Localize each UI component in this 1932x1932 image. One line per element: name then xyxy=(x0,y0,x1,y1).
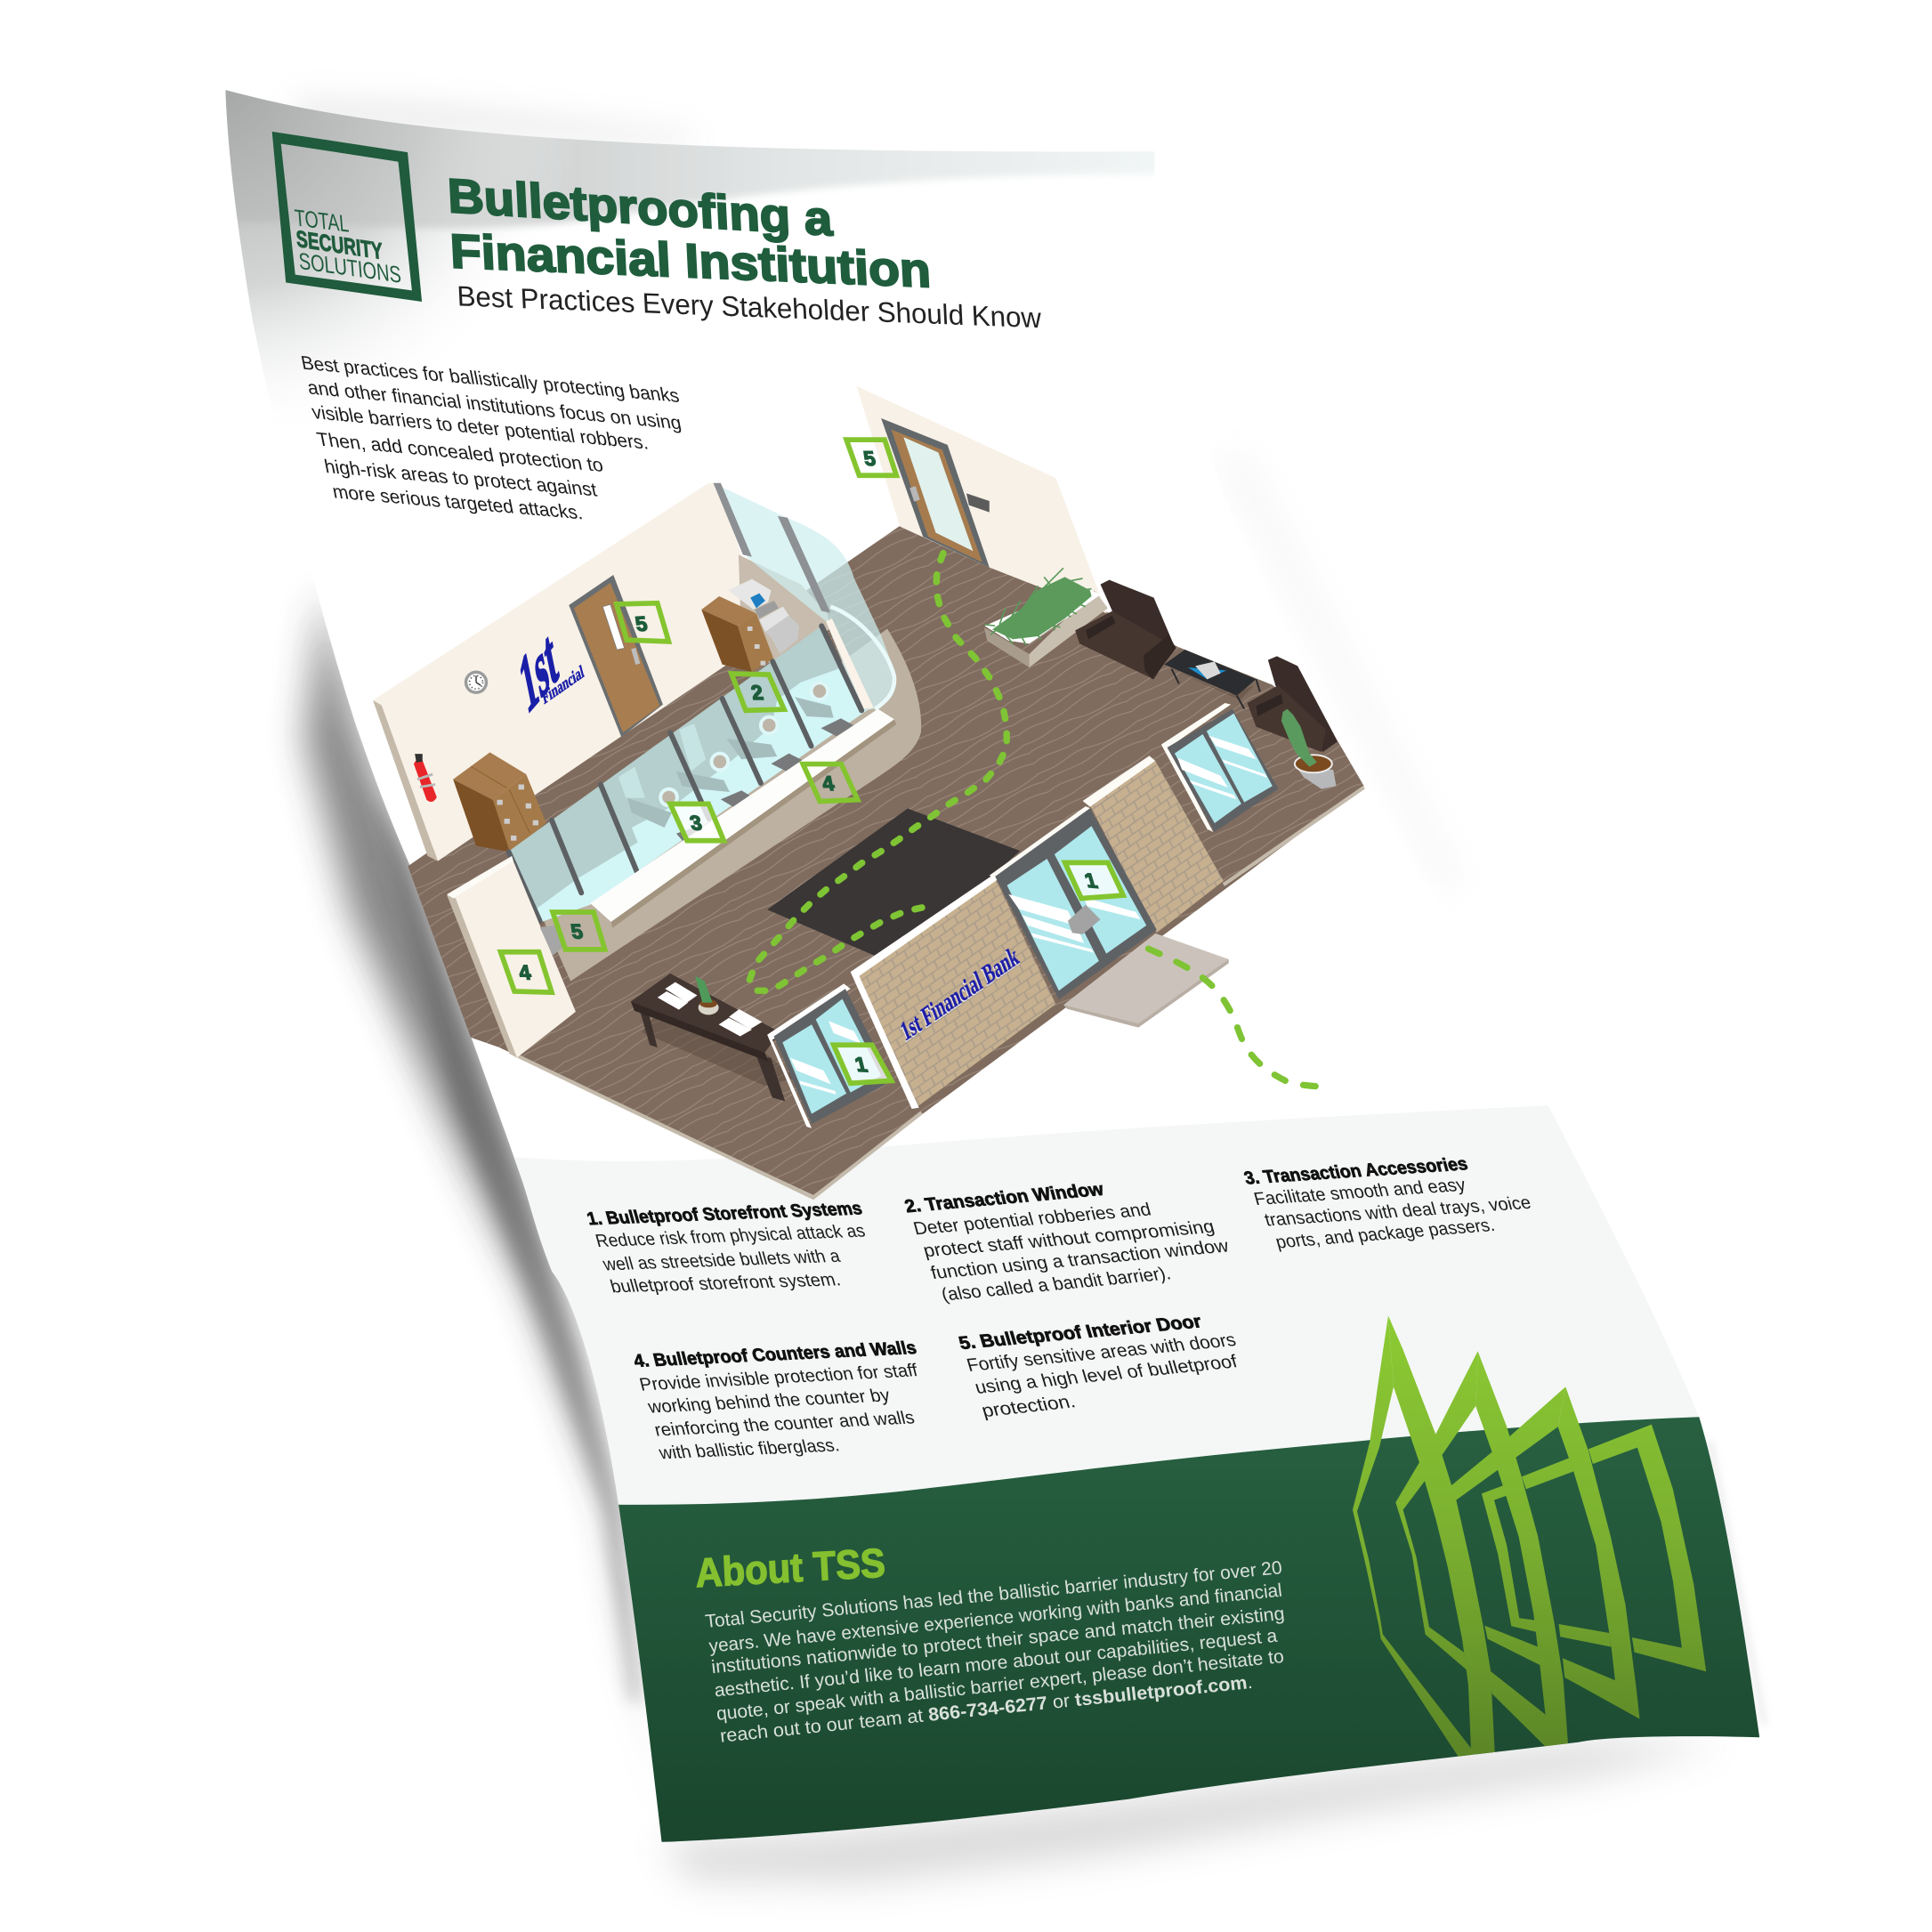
tag 4 counter: 4 xyxy=(820,772,837,795)
subtitle: Best Practices Every Stakeholder Should Know xyxy=(457,279,1043,334)
logo: Total Security Solutions: TOTAL xyxy=(294,204,350,238)
intro text: high-risk areas to protect against xyxy=(322,455,599,501)
about heading: About TSS xyxy=(694,1540,886,1596)
counter shade xyxy=(611,719,896,928)
wall logo: 1st xyxy=(513,610,563,732)
item 5: interior door: 5. Bulletproof Interior Door xyxy=(957,1312,1204,1354)
tag 1 window xyxy=(834,1045,892,1083)
teller area, zoom coordinates xyxy=(509,483,896,928)
tag 3 xyxy=(670,804,723,841)
item 4: counters and walls xyxy=(632,1338,920,1463)
intro text: Best practices for ballistically protecting banks xyxy=(299,352,681,407)
item 1: storefront systems: Reduce risk from physical attack as xyxy=(594,1221,868,1251)
right window xyxy=(1161,703,1279,832)
planter xyxy=(984,568,1108,667)
item 2: transaction window: 2. Transaction Window xyxy=(902,1179,1106,1217)
about text: reach out to our team at 866-734-6277 or tssbulletproof.com . xyxy=(719,1672,1254,1747)
item 4: counters and walls: reinforcing the counter and walls xyxy=(652,1409,917,1440)
entrance mat xyxy=(767,808,1020,956)
interior, drawn in crop coordinates xyxy=(373,386,1107,1101)
logo: Total Security Solutions xyxy=(272,132,422,302)
item 3: transaction accessories: Facilitate smooth and easy xyxy=(1251,1175,1468,1209)
poster sheet xyxy=(226,90,1760,1842)
copier xyxy=(728,579,799,654)
entrance door xyxy=(990,806,1157,999)
floor xyxy=(408,526,1364,1195)
item 4: counters and walls: working behind the counter by xyxy=(645,1386,893,1418)
intro text: and other financial institutions focus on using xyxy=(305,376,683,434)
item 5: interior door: Fortify sensitive areas with doors xyxy=(965,1330,1239,1376)
intro text: more serious targeted attacks. xyxy=(330,481,585,523)
floor edge xyxy=(515,788,1364,1198)
tag 5 lower: 5 xyxy=(569,919,585,942)
item 5: interior door xyxy=(957,1312,1240,1421)
coffee table xyxy=(1164,650,1260,709)
title: Bulletproofing a xyxy=(447,169,835,247)
about text xyxy=(704,1557,1286,1747)
about text: quote, or speak with a ballistic barrier expert, please don’t hesitate to xyxy=(715,1646,1285,1725)
green about band xyxy=(618,1417,1760,1842)
item 5: interior door: protection. xyxy=(979,1391,1078,1421)
left stub wall xyxy=(447,856,576,1058)
title xyxy=(447,169,932,298)
item 2: transaction window xyxy=(902,1179,1231,1306)
tag 5 interior door xyxy=(617,603,668,642)
item 3: transaction accessories xyxy=(1241,1153,1533,1252)
bank sign: 1st Financial Bank xyxy=(897,941,1023,1047)
item 4: counters and walls: with ballistic fiberglass. xyxy=(657,1436,842,1463)
right wall trim xyxy=(1083,756,1155,807)
door sign xyxy=(966,493,990,513)
intro text xyxy=(299,352,683,523)
item 4: counters and walls: 4. Bulletproof Counters and Walls xyxy=(632,1338,918,1371)
right cabinet xyxy=(701,596,773,672)
item 1: storefront systems: bulletproof storefront system. xyxy=(608,1270,843,1297)
pale details panel xyxy=(514,1105,1699,1504)
title: Financial Institution xyxy=(449,225,932,298)
isometric bank floor plan xyxy=(373,386,1364,1198)
glass posts xyxy=(509,626,861,921)
item 1: storefront systems xyxy=(585,1199,868,1297)
item 2: transaction window: protect staff without compromising xyxy=(921,1217,1217,1261)
right brick wall xyxy=(1090,761,1224,933)
front table xyxy=(631,974,796,1101)
item 2: transaction window: (also called a bandit barrier). xyxy=(939,1263,1173,1306)
intro text: Then, add concealed protection to xyxy=(315,428,605,476)
item 2: transaction window: function using a transaction window xyxy=(928,1236,1231,1283)
upper light panels xyxy=(618,767,645,798)
tag 5 lower xyxy=(553,912,605,950)
armchair 2 xyxy=(1248,656,1338,752)
top-left corner shade xyxy=(226,90,518,376)
logo: Total Security Solutions: SECURITY xyxy=(295,225,384,264)
item 3: transaction accessories: 3. Transaction Accessories xyxy=(1241,1153,1470,1188)
teller desks xyxy=(627,697,834,828)
tag 1 door xyxy=(1065,862,1123,898)
intro text: visible barriers to deter potential robbers. xyxy=(310,400,650,454)
numbered tags xyxy=(501,440,1123,1083)
route dashes xyxy=(749,554,1006,990)
counter base xyxy=(529,628,921,981)
door wall xyxy=(857,386,1107,613)
lobby and entrance, zoom coordinates xyxy=(984,568,1338,999)
transaction window glass xyxy=(509,626,869,923)
back half wall xyxy=(739,554,830,665)
panel xyxy=(679,723,706,772)
about text: years. We have extensive experience working with banks and financial xyxy=(707,1580,1283,1657)
top sheen band xyxy=(226,90,1155,231)
item 2: transaction window: Deter potential robberies and xyxy=(911,1200,1153,1239)
armchair 1 xyxy=(1075,580,1176,679)
voice ports xyxy=(660,683,828,805)
entrance step xyxy=(1063,934,1229,1028)
about text: institutions nationwide to protect their space and match their existing xyxy=(710,1604,1286,1677)
logo: Total Security Solutions: SOLUTIONS xyxy=(298,247,402,288)
about text: aesthetic. If you’d like to learn more about our capabilities, request a xyxy=(713,1626,1279,1702)
crop-2 front wall pieces xyxy=(767,874,1055,1128)
fire extinguisher xyxy=(414,754,437,802)
tag 1 window: 1 xyxy=(853,1053,869,1076)
item 1: storefront systems: well as streetside bullets with a xyxy=(600,1246,843,1274)
curved glass screen xyxy=(714,483,894,710)
outdoor route dashes xyxy=(1148,949,1330,1087)
item 5: interior door: using a high level of bulletproof xyxy=(973,1351,1240,1398)
item 3: transaction accessories: transactions with deal trays, voice xyxy=(1262,1192,1533,1231)
glass door xyxy=(881,418,990,568)
TSS chevron mark xyxy=(1353,1315,1706,1758)
tag 2: 2 xyxy=(749,681,765,704)
tag 1 door: 1 xyxy=(1082,869,1100,893)
tag 5 back door xyxy=(846,440,896,475)
tag 4 wall xyxy=(501,952,552,992)
item 3: transaction accessories: ports, and package passers. xyxy=(1273,1215,1497,1252)
front brick wall xyxy=(854,877,1055,1106)
item 4: counters and walls: Provide invisible protection for staff xyxy=(637,1361,920,1395)
lower window xyxy=(767,983,893,1128)
potted cactus xyxy=(1281,709,1336,789)
counter top xyxy=(590,709,894,922)
deal trays xyxy=(676,718,853,844)
item 1: storefront systems: 1. Bulletproof Storefront Systems xyxy=(585,1199,864,1229)
tag 4 counter xyxy=(803,764,858,801)
wall trim xyxy=(851,874,998,1109)
clock xyxy=(465,671,488,694)
about text: Total Security Solutions has led the ballistic barrier industry for over 20 xyxy=(704,1557,1283,1632)
tag 3: 3 xyxy=(688,812,704,835)
interior door xyxy=(569,575,663,737)
left cabinet xyxy=(453,752,546,853)
paper drop shadows xyxy=(295,99,1766,1883)
tag 2 xyxy=(732,674,784,710)
tag 4 wall: 4 xyxy=(517,961,533,984)
wall logo: Financial xyxy=(540,662,586,708)
back wall side xyxy=(373,700,438,861)
tag 5 interior door: 5 xyxy=(634,612,650,635)
tag 5 back door: 5 xyxy=(861,447,877,470)
back wall xyxy=(373,483,764,861)
